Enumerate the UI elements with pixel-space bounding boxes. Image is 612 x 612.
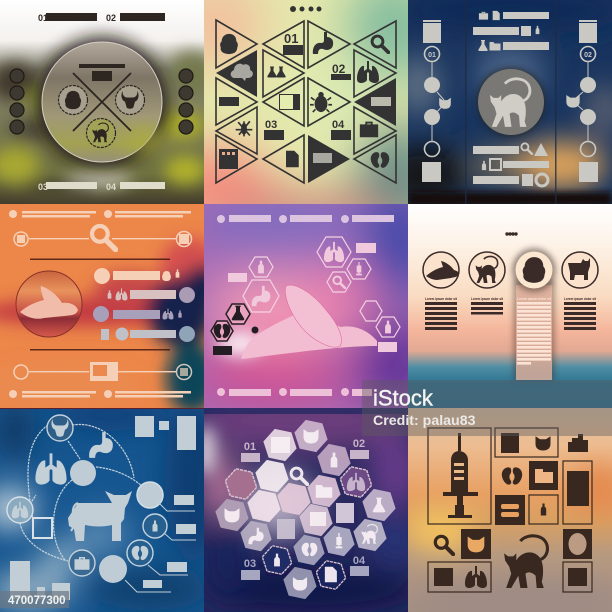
icon: cat <box>86 118 116 148</box>
circle shadow <box>36 36 168 168</box>
filled triangles <box>216 50 396 183</box>
panel: sunset gradient infographic with four animal circles <box>408 204 612 408</box>
panel: violet hexagon cluster infographic: 03 <box>244 558 256 570</box>
icon: bull head <box>116 86 144 114</box>
panel: violet hexagon cluster infographic: 04 <box>353 555 366 567</box>
left icon column <box>10 69 24 134</box>
grid icons <box>434 433 592 588</box>
number labels: 04 <box>332 119 345 131</box>
text columns: Lorem ipsum dolor sit <box>564 296 596 301</box>
outlined hexagons <box>222 465 375 591</box>
light hexagons <box>243 237 400 337</box>
text columns: Lorem ipsum dolor sit <box>425 296 457 301</box>
turtle medallion <box>16 271 82 337</box>
animal circle: turtle <box>423 252 459 288</box>
right captions <box>125 416 196 592</box>
panel: mountain blur infographic with circular diagram <box>0 13 204 204</box>
centre bottom rows <box>473 143 549 186</box>
header dots <box>505 232 518 236</box>
watermark band <box>362 380 612 436</box>
animal circle: cow <box>562 252 598 288</box>
icon: big syringe <box>443 433 478 518</box>
light hexagon icons <box>228 242 397 352</box>
number labels <box>241 438 369 462</box>
panel: purple pink infographic with turtle and hexagons <box>204 204 408 408</box>
left timeline: 01 <box>428 52 436 59</box>
triangle outlines <box>216 20 396 183</box>
bottom frame timeline <box>14 362 192 381</box>
light icons on filled triangles <box>231 64 391 163</box>
cow silhouette <box>68 491 132 541</box>
centre top rows <box>473 11 549 51</box>
panel: triangle grid infographic <box>204 0 408 204</box>
number labels: 01 <box>284 31 298 46</box>
magnifier timeline <box>14 226 192 250</box>
network rings <box>20 424 143 561</box>
central metallic circle <box>42 42 165 162</box>
black hexagon icons <box>211 304 258 355</box>
right timeline <box>566 20 598 182</box>
text columns: Lorem ipsum dolor sit <box>471 296 503 301</box>
watermark: image id <box>0 591 69 608</box>
number labels <box>264 31 351 140</box>
top labels 01 and 02: 01 <box>38 13 48 23</box>
network nodes <box>7 415 167 583</box>
caption rows <box>217 215 394 223</box>
number labels: 01 <box>244 441 256 453</box>
top captions <box>9 210 191 218</box>
bottom captions <box>9 390 191 398</box>
number labels: 03 <box>265 119 277 131</box>
bottom left captions <box>10 561 70 600</box>
number labels: 02 <box>353 438 365 450</box>
cat medallion <box>476 67 546 137</box>
dividers <box>30 258 170 350</box>
panel: tan grid infographic with syringe and cat <box>405 408 612 612</box>
frames <box>428 428 592 592</box>
top labels 01 and 02: 02 <box>106 13 116 23</box>
right timeline: 02 <box>584 52 592 59</box>
hexagon icons <box>224 429 385 591</box>
triangle icons <box>219 32 389 169</box>
panel: orange sunset infographic with turtle <box>0 204 204 408</box>
icon: hedgehog <box>58 86 88 114</box>
hexagon cells <box>212 418 399 601</box>
animal circle: cat <box>469 252 505 288</box>
bottom labels 03 and 04: 04 <box>106 182 116 192</box>
bottom labels 03 and 04 <box>38 182 165 190</box>
panel dividers <box>465 0 556 204</box>
top labels 01 and 02 <box>38 13 165 21</box>
crossed lines <box>73 73 131 131</box>
bottom labels 03 and 04: 03 <box>38 182 48 192</box>
circle heading <box>79 64 125 81</box>
right icon column <box>179 69 193 134</box>
highlighted column shadow <box>513 280 555 380</box>
panel: violet hexagon cluster infographic <box>190 388 420 612</box>
panel: night sky infographic with cat <box>408 0 612 204</box>
highlighted text column: Lorem ipsum dolor sit <box>517 296 552 301</box>
watermark: iStock logo text: iStock <box>373 386 434 410</box>
turtle illustration <box>241 285 377 359</box>
watermark: credit line: Credit: palau83 <box>373 413 476 429</box>
left timeline <box>422 20 451 182</box>
panel: blue infographic with cow network <box>0 399 225 612</box>
text columns <box>425 296 596 330</box>
watermark: image id: 470077300 <box>8 595 66 607</box>
animal circle: hedgehog <box>512 248 556 292</box>
number labels: 02 <box>332 62 346 76</box>
small header icons <box>290 6 322 12</box>
highlighted text column <box>517 296 552 365</box>
icon rows <box>94 268 179 284</box>
